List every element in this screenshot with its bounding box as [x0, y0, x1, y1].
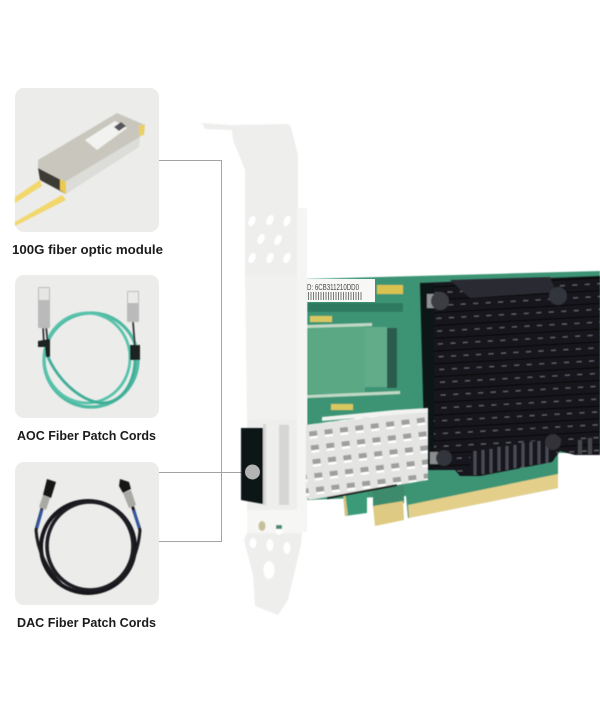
QSFP port [241, 424, 289, 505]
panel: 100G fiber optic module [15, 88, 159, 232]
heading: 100G fiber optic module: 100G fiber optic module [12, 242, 163, 257]
heading: DAC fiber patch cords: DAC Fiber Patch Cords [17, 615, 156, 630]
PCB board [307, 271, 600, 526]
icon: optical transceiver module [15, 113, 145, 226]
connector bracket lines [159, 160, 247, 542]
icon: DAC cable [36, 479, 140, 593]
heading: AOC fiber patch cords: AOC Fiber Patch Cords [17, 428, 156, 443]
QSFP cage [306, 408, 428, 500]
serial number sticker [307, 279, 375, 302]
icon: AOC cable [38, 287, 140, 407]
panel: DAC fiber patch cords [15, 462, 159, 605]
metal bracket [202, 123, 307, 615]
serial number sticker: D: 6CB311210DD0 [307, 283, 359, 292]
heat sink [420, 276, 600, 476]
bracket vent holes [247, 214, 292, 579]
panel: AOC fiber patch cords [15, 275, 159, 418]
connection point [245, 464, 260, 480]
graphic: network card [202, 123, 600, 615]
